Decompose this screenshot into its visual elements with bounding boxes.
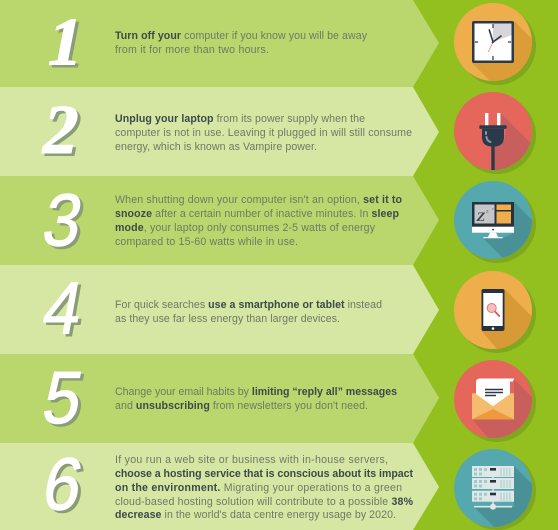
panel: tip 1 <box>0 0 536 87</box>
text: tip 3: mode, your laptop only consumes 2-5 watts of energy <box>115 222 376 234</box>
text: tip 4: as they use far less energy than larger devices. <box>115 313 340 325</box>
text: tip 5: and unsubscribing from newsletters you don't need. <box>115 400 368 412</box>
text: tip 1: from it for more than two hours. <box>115 44 269 56</box>
number 6: 6 <box>40 446 92 529</box>
panel: tip 4 <box>0 265 536 354</box>
number 5: 5 <box>40 360 92 442</box>
text: tip 6: decrease in the world's data centre energy usage by 2020. <box>115 509 396 521</box>
number 3: 3 <box>37 180 89 262</box>
number 1: 1 <box>41 4 90 79</box>
text: tip 1: Turn off your computer if you know you will be away <box>115 30 368 42</box>
icon: server rack <box>454 449 536 530</box>
text: tip 3 <box>115 194 403 248</box>
text: tip 2: energy, which is known as Vampire power. <box>115 141 317 153</box>
icon: sleeping monitor: Z <box>475 209 487 224</box>
panel: tip 5 <box>0 354 536 443</box>
text: tip 3: When shutting down your computer isn't an option, set it to <box>115 194 403 206</box>
panel: tip 6 <box>0 443 536 530</box>
text: tip 6: If you run a web site or business with in-house servers, <box>115 454 388 466</box>
text: tip 5: Change your email habits by limiting “reply all” messages <box>115 386 397 398</box>
text: tip 2 <box>115 113 412 153</box>
number 3: 3 <box>40 182 92 265</box>
number 2: 2 <box>36 92 86 169</box>
text: tip 4: For quick searches use a smartphone or tablet instead <box>115 299 382 311</box>
text: tip 2: computer is not in use. Leaving it plugged in will still consume <box>115 127 412 139</box>
number 1: 1 <box>44 7 93 82</box>
text: tip 4 <box>115 299 382 325</box>
icon: sleeping monitor <box>454 181 536 263</box>
icon: sleeping monitor: z <box>492 206 494 211</box>
panel: tip 3 <box>0 176 536 265</box>
text: tip 1 <box>115 30 368 56</box>
icon: clock <box>454 3 536 85</box>
text: tip 6: choose a hosting service that is conscious about its impact <box>115 468 413 480</box>
icon: envelope <box>454 360 536 442</box>
text: tip 6: on the environment. Migrating your operations to a green <box>115 482 402 494</box>
icon: power plug <box>454 92 536 174</box>
number 4: 4 <box>37 268 89 350</box>
text: tip 2: Unplug your laptop from its power supply when the <box>115 113 365 125</box>
text: tip 6 <box>115 454 414 521</box>
text: tip 5 <box>115 386 397 412</box>
number 6: 6 <box>37 444 89 526</box>
number 2: 2 <box>39 94 89 171</box>
icon: smartphone search <box>454 271 536 353</box>
number 4: 4 <box>40 270 92 353</box>
icon: sleeping monitor: z <box>486 209 489 215</box>
text: tip 6: cloud-based hosting solution will contribute to a possible 38% <box>115 496 414 508</box>
number 5: 5 <box>37 357 89 440</box>
panel: tip 2 <box>0 87 536 176</box>
text: tip 3: compared to 15-60 watts while in use. <box>115 236 298 248</box>
text: tip 3: snooze after a certain number of inactive minutes. In sleep <box>115 208 400 220</box>
